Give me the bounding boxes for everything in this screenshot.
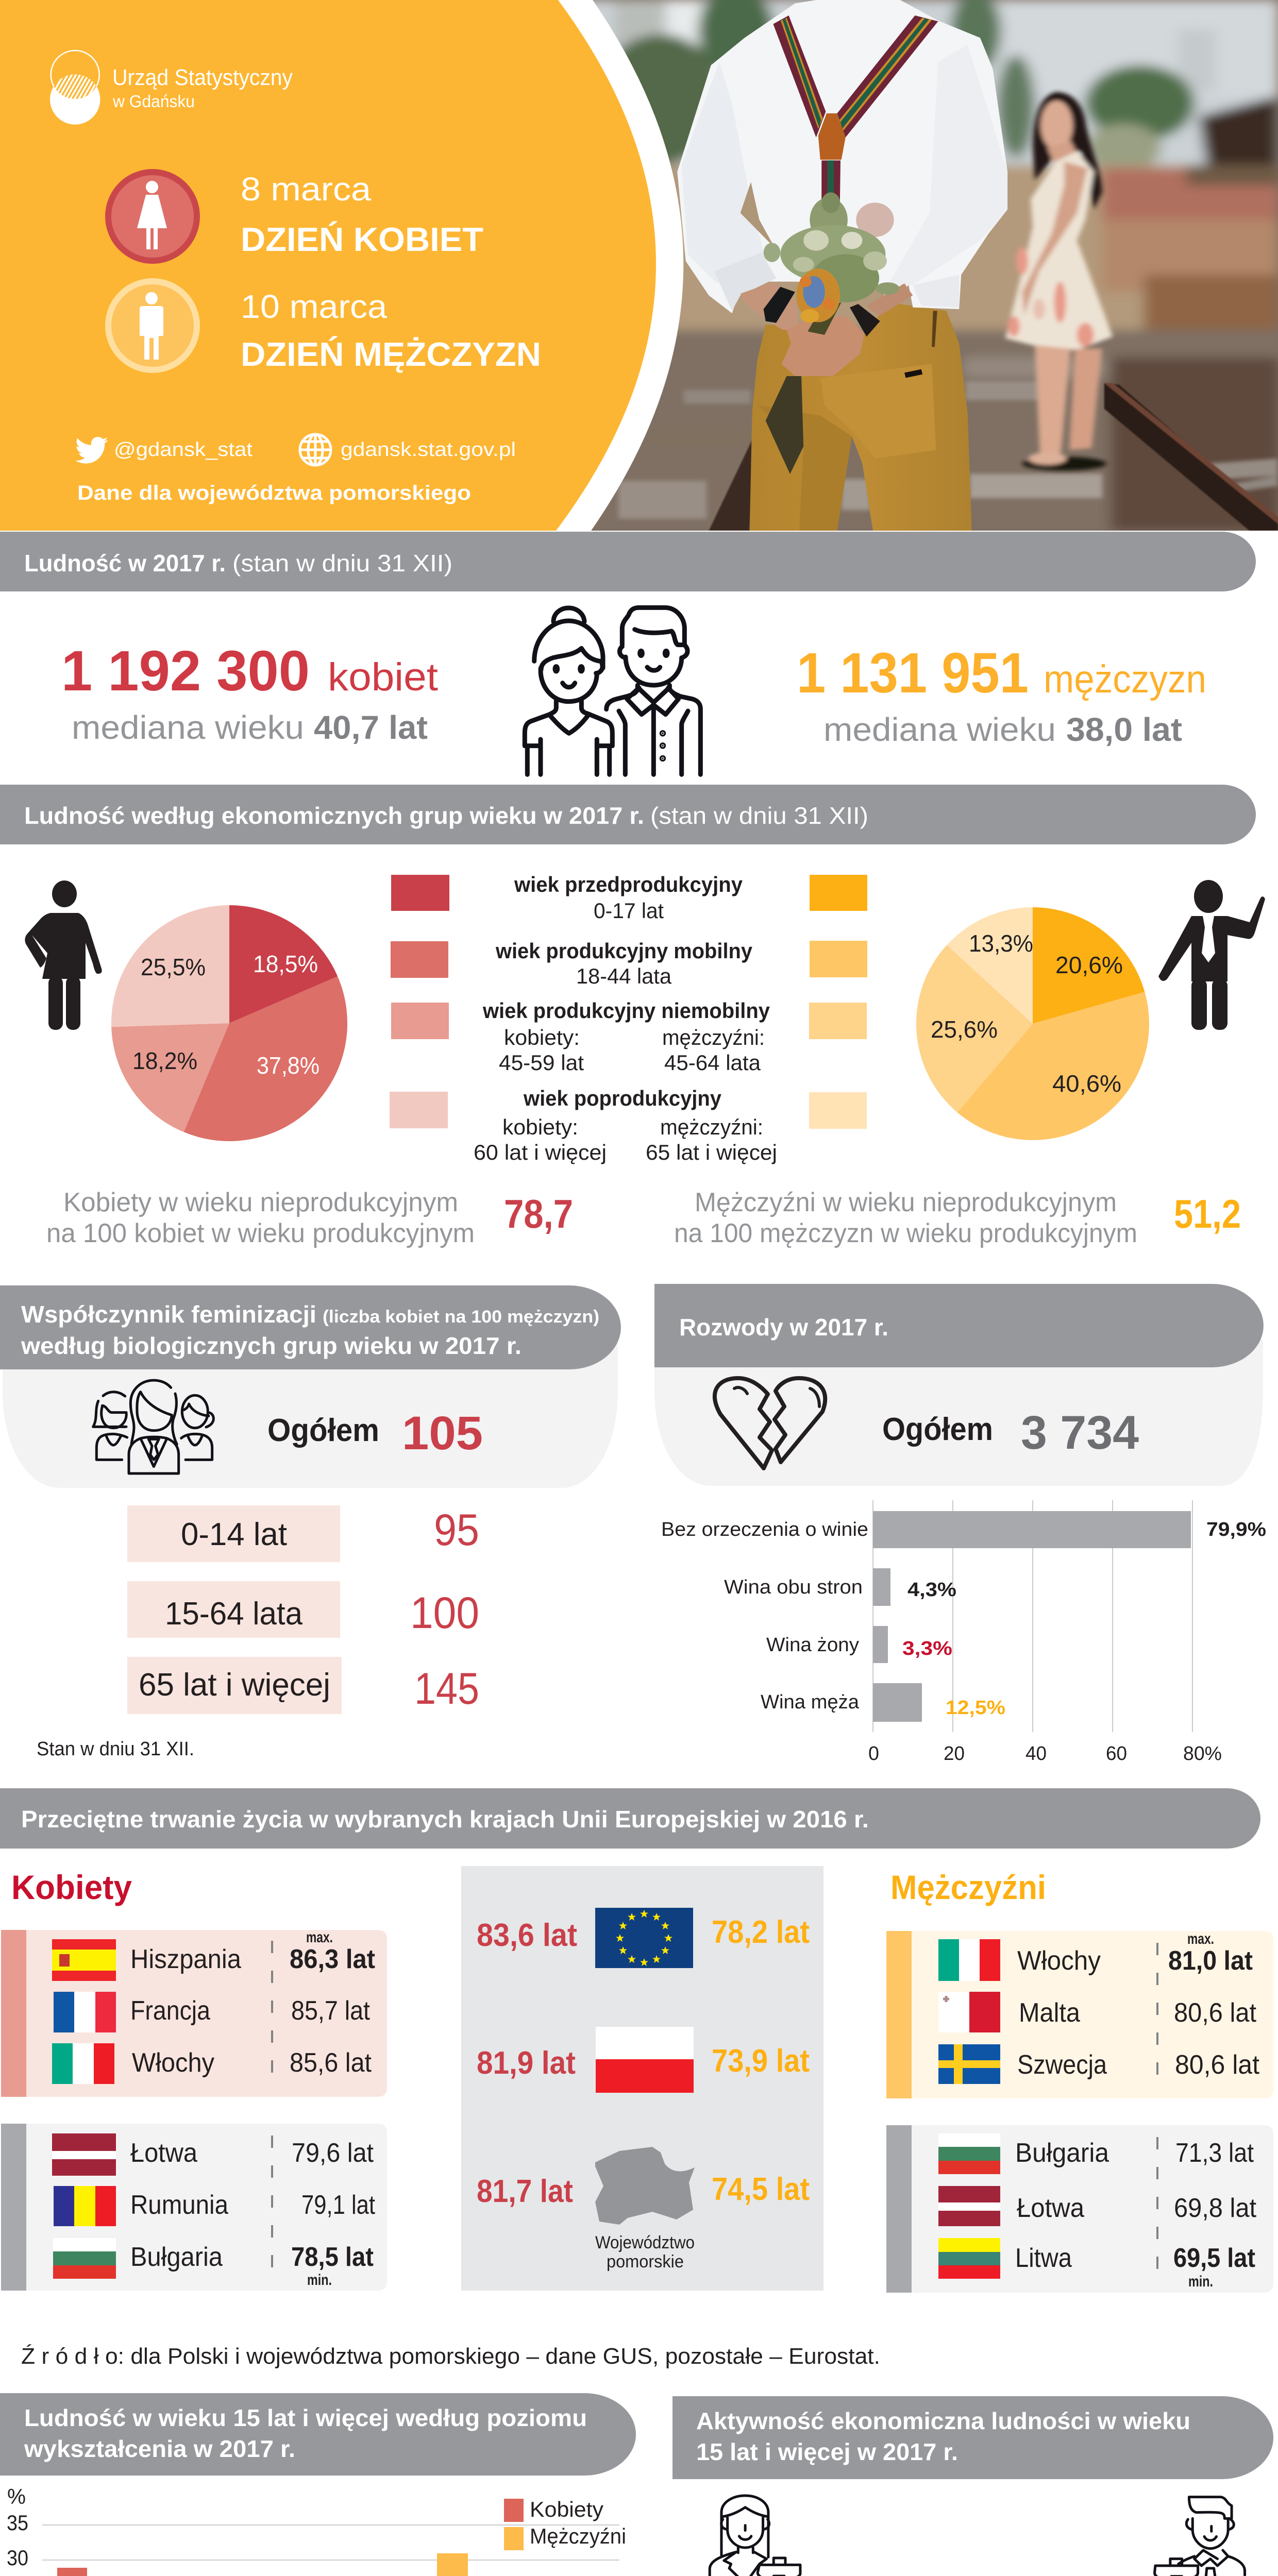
panel background — [654, 1340, 1263, 1486]
legend: age groups: wiek przedprodukcyjny — [514, 872, 743, 896]
women population: mediana wieku — [72, 709, 304, 746]
flag: France — [54, 1992, 116, 2032]
gridlines and y axis: 30 — [7, 2546, 28, 2570]
dependency ratio: women: Kobiety w wieku nieprodukcyjnym — [63, 1188, 458, 1217]
text: 8 marca Dzień Kobiet — [241, 171, 483, 258]
panel: women top countries: 85,6 lat — [290, 2048, 372, 2078]
heading: Ludność w 2017 r.: (stan w dniu 31 XII) — [232, 550, 452, 577]
legend: Mężczyźni — [530, 2524, 626, 2548]
subheading: men: Mężczyźni — [890, 1868, 1046, 1906]
heading: (liczba kobiet na 100 mężczyzn) — [323, 1307, 599, 1327]
panel: women bottom countries: Rumunia — [130, 2190, 228, 2220]
women population — [61, 639, 438, 746]
bar chart: divorces by fault: 80% — [1183, 1743, 1222, 1765]
dependency ratio: women: 78,7 — [504, 1191, 573, 1236]
website: gdansk.stat.gov.pl — [341, 439, 516, 461]
legend: age groups: kobiety: — [502, 1115, 578, 1139]
flag: Latvia — [938, 2186, 1000, 2226]
panel: women top countries: Francja — [130, 1996, 210, 2026]
icon: woman silhouette — [25, 880, 102, 1030]
bar chart: divorces by fault: Bez orzeczenia o winie — [661, 1519, 868, 1540]
panel: women top countries: Hiszpania — [130, 1944, 241, 1974]
panel: EU, Poland and Pomeranian values — [461, 1866, 823, 2291]
flag: Poland — [596, 2027, 694, 2093]
gridlines and y axis: 35 — [7, 2511, 28, 2535]
dependency ratio: men — [674, 1188, 1241, 1248]
flag: Malta — [938, 1992, 1000, 2032]
pie chart: men by age group — [916, 907, 1149, 1140]
legend: age groups — [390, 872, 867, 1164]
hands and forearms — [741, 282, 913, 376]
total value: 105 — [402, 1407, 483, 1460]
flag: Italy — [938, 1939, 1000, 1981]
pie chart: men by age group: 40,6% — [1052, 1070, 1121, 1097]
legend: age groups: wiek produkcyjny mobilny — [495, 939, 753, 963]
panel: men bottom countries: min. — [1188, 2273, 1213, 2290]
row: European Union: 78,2 lat — [712, 1914, 810, 1950]
pie chart: women by age group: 18,5% — [253, 951, 318, 977]
icon: globe — [300, 434, 331, 465]
photo: man with bouquet and woman on railway tracks — [591, 0, 1278, 531]
men population: mężczyzn — [1044, 657, 1206, 701]
bar chart: divorces by fault: Wina żony — [766, 1634, 859, 1656]
icon: woman with briefcase — [710, 2496, 801, 2576]
flag: Spain — [52, 1939, 116, 1981]
age group rows — [127, 1505, 479, 1714]
pie chart: women by age group: 37,8% — [257, 1052, 320, 1079]
row: 15-64: 100 — [410, 1588, 479, 1638]
text: 10 marca Dzień Mężczyzn: 10 marca — [241, 288, 387, 325]
panel: men bottom countries: Litwa — [1015, 2243, 1072, 2273]
pie chart: women by age group: 18,2% — [132, 1047, 197, 1074]
row: Poland — [477, 2027, 810, 2093]
panel: women bottom countries: min. — [307, 2272, 332, 2289]
bar chart: divorces by fault: 0 — [868, 1743, 879, 1765]
icon: group of people — [93, 1380, 213, 1473]
row: Poland: 73,9 lat — [712, 2043, 810, 2079]
flag: Lithuania — [938, 2238, 1000, 2279]
legend: age groups: kobiety: — [504, 1025, 580, 1049]
legend — [504, 2497, 626, 2550]
dependency ratio: men: na 100 mężczyzn w wieku produkcyjnym — [674, 1218, 1137, 1248]
suspenders — [773, 15, 938, 220]
panel: women bottom countries — [1, 2124, 387, 2291]
heading: education — [0, 2393, 636, 2476]
text: 10 marca Dzień Mężczyzn — [241, 288, 541, 373]
bar chart: divorces by fault: 60 — [1106, 1743, 1127, 1765]
panel background — [3, 1340, 618, 1488]
bar chart: divorces by fault: Wina męża — [761, 1691, 860, 1713]
row: 65+: 65 lat i więcej — [139, 1667, 330, 1703]
row: 0-14: 95 — [434, 1505, 479, 1555]
heading: Ludność w 2017 r. — [0, 532, 1256, 591]
row: 15-64: 15-64 lata — [165, 1596, 302, 1632]
panel: women top countries: Włochy — [132, 2048, 214, 2078]
text: 8 marca Dzień Kobiet: DZIEŃ KOBIET — [241, 221, 483, 258]
bar chart: education — [7, 2484, 626, 2576]
panel: feminization ratio — [0, 1285, 621, 1488]
heading: life expectancy — [0, 1788, 1260, 1849]
dependency ratio: men: 51,2 — [1174, 1191, 1241, 1236]
row: 15-64 — [127, 1581, 479, 1638]
row: Pomeranian voivodeship: Województwo — [595, 2233, 695, 2252]
panel: men top countries: 81,0 lat — [1168, 1946, 1253, 1976]
logo: Urząd Statystyczny w Gdańsku — [43, 50, 293, 125]
row: Poland: 81,9 lat — [477, 2045, 576, 2081]
twitter handle: @gdansk_stat — [114, 439, 253, 461]
panel: women top countries: 86,3 lat — [290, 1944, 375, 1974]
row: Pomeranian voivodeship — [477, 2147, 810, 2272]
source: life expectancy: Ź r ó d ł o: dla Polski i województwa pomorskiego – dane GUS, pozostałe – Eurostat. — [21, 2344, 880, 2369]
icon: broken heart — [715, 1378, 825, 1468]
flag: EU — [595, 1908, 693, 1968]
legend: age groups: 45-59 lat — [499, 1050, 584, 1075]
icon: man silhouette — [1158, 880, 1265, 1030]
row: European Union: 83,6 lat — [477, 1918, 577, 1953]
bar chart: divorces by fault — [661, 1500, 1266, 1765]
total value: 3 734 — [1021, 1406, 1139, 1459]
men population: 1 131 951 — [797, 641, 1029, 705]
panel: women bottom countries: 78,5 lat — [291, 2242, 374, 2272]
heading: Rozwody w 2017 r. — [679, 1314, 888, 1341]
men population: 38,0 lat — [1066, 711, 1182, 748]
panel: men top countries: max. — [1187, 1930, 1214, 1947]
heading: economic age groups: Ludność według ekonomicznych grup wieku w 2017 r. — [24, 802, 644, 829]
flag: Bulgaria — [53, 2238, 116, 2279]
bar chart: divorces by fault: 12,5% — [946, 1697, 1005, 1719]
pie chart: women by age group — [111, 905, 347, 1141]
panel: men top countries — [886, 1930, 1273, 2098]
total: Ogółem — [267, 1413, 379, 1448]
pie chart: women by age group: 25,5% — [141, 954, 206, 980]
panel: women bottom countries: 79,1 lat — [301, 2190, 375, 2220]
hero banner — [0, 0, 1278, 531]
bar chart: divorces by fault: 20 — [944, 1743, 965, 1765]
bars — [57, 2553, 584, 2576]
icon: woman in circle — [108, 172, 197, 261]
text: 8 marca Dzień Kobiet: 8 marca — [241, 171, 371, 208]
row: 0-14: 0-14 lat — [181, 1517, 287, 1552]
flag: Romania — [54, 2186, 116, 2226]
total: Ogółem — [882, 1412, 993, 1447]
flag: Latvia — [52, 2133, 116, 2176]
panel: women top countries: max. — [306, 1929, 333, 1946]
panel: men top countries: 80,6 lat — [1174, 1998, 1257, 2028]
legend: age groups: wiek produkcyjny niemobilny — [482, 998, 770, 1023]
row: European Union — [477, 1908, 810, 1968]
legend: age groups: mężczyźni: — [660, 1115, 763, 1139]
map: Pomeranian voivodeship — [595, 2147, 695, 2225]
gridlines and y axis: % — [7, 2484, 26, 2509]
heading: education: Ludność w wieku 15 lat i więcej według poziomu — [24, 2404, 587, 2431]
row: Pomeranian voivodeship: 74,5 lat — [712, 2172, 810, 2207]
flag: Sweden — [938, 2044, 1000, 2084]
men population: mediana wieku — [823, 711, 1056, 748]
icon: man with briefcase — [1155, 2497, 1245, 2576]
panel: men bottom countries: Łotwa — [1017, 2193, 1084, 2223]
woman in the background — [1005, 92, 1113, 470]
women population: kobiet — [328, 655, 438, 699]
legend: age groups: 60 lat i więcej — [474, 1140, 607, 1164]
note: Stan w dniu 31 XII. — [37, 1738, 194, 1760]
yellow curved panel — [0, 0, 656, 531]
heading: life expectancy: Przeciętne trwanie życia w wybranych krajach Unii Europejskiej w 2016 r. — [21, 1806, 869, 1833]
legend: age groups: mężczyźni: — [662, 1025, 765, 1049]
bouquet — [764, 192, 899, 474]
icon: twitter — [75, 437, 108, 464]
row: 65+: 145 — [414, 1664, 479, 1714]
white curve — [0, 0, 683, 531]
legend: age groups: 0-17 lat — [594, 899, 664, 923]
women population: 1 192 300 — [61, 639, 310, 703]
logo: Urząd Statystyczny w Gdańsku: Urząd Statystyczny — [112, 65, 293, 90]
panel: men bottom countries: 71,3 lat — [1175, 2138, 1254, 2168]
bar chart: divorces by fault: Wina obu stron — [724, 1577, 863, 1598]
heading: Współczynnik feminizacji — [21, 1301, 316, 1328]
heading: education: wykształcenia w 2017 r. — [24, 2435, 295, 2462]
panel: men bottom countries: 69,5 lat — [1173, 2243, 1255, 2273]
man's trousers — [750, 302, 972, 531]
pie chart: men by age group: 13,3% — [969, 930, 1033, 957]
flag: Italy — [52, 2043, 114, 2084]
railway rails — [709, 383, 1278, 531]
panel: women top countries: 85,7 lat — [291, 1996, 370, 2026]
bar chart: divorces by fault: 4,3% — [907, 1579, 956, 1601]
subheading: women: Kobiety — [11, 1868, 132, 1906]
bar chart: divorces by fault: 3,3% — [902, 1638, 952, 1659]
legend: age groups: 65 lat i więcej — [646, 1140, 777, 1164]
dependency ratio: women — [46, 1188, 573, 1248]
panel: men top countries: Włochy — [1017, 1946, 1101, 1976]
legend: Kobiety — [530, 2497, 603, 2521]
heading — [0, 1285, 621, 1369]
heading — [654, 1284, 1264, 1367]
panel: women bottom countries: Łotwa — [130, 2138, 197, 2168]
bar chart: divorces by fault: 79,9% — [1206, 1519, 1266, 1540]
row: Pomeranian voivodeship: pomorskie — [607, 2252, 684, 2272]
legend: age groups: 18-44 lata — [576, 964, 672, 988]
row: Pomeranian voivodeship: 81,7 lat — [477, 2174, 573, 2209]
dependency ratio: men: Mężczyźni w wieku nieprodukcyjnym — [695, 1188, 1117, 1217]
panel: women bottom countries: Bułgaria — [130, 2242, 223, 2272]
heading: economic age groups: (stan w dniu 31 XII) — [650, 802, 868, 829]
men population — [797, 641, 1206, 748]
panel: women bottom countries: 79,6 lat — [292, 2138, 374, 2168]
panel: men top countries: Szwecja — [1017, 2050, 1107, 2080]
heading: według biologicznych grup wieku w 2017 r. — [21, 1332, 522, 1359]
dependency ratio: women: na 100 kobiet w wieku produkcyjnym — [46, 1218, 475, 1248]
gridlines and y axis — [7, 2484, 619, 2576]
heading: Ludność w 2017 r.: Ludność w 2017 r. — [24, 550, 226, 577]
panel: men bottom countries: 69,8 lat — [1174, 2193, 1257, 2223]
pie chart: men by age group: 25,6% — [931, 1016, 998, 1043]
data scope: Dane dla województwa pomorskiego — [77, 482, 471, 504]
flag: Bulgaria — [938, 2133, 1000, 2174]
panel: men top countries: 80,6 lat — [1175, 2050, 1260, 2080]
legend: age groups: 45-64 lata — [664, 1050, 761, 1075]
panel: men bottom countries: Bułgaria — [1015, 2138, 1109, 2168]
heading: economic activity — [672, 2396, 1273, 2479]
panel: men top countries: Malta — [1019, 1998, 1080, 2028]
bar chart: divorces by fault: 40 — [1025, 1743, 1047, 1765]
icon: couple — [525, 607, 700, 774]
man's shirt — [677, 0, 1007, 313]
logo: Urząd Statystyczny w Gdańsku: w Gdańsku — [112, 92, 195, 111]
women population: 40,7 lat — [314, 709, 428, 746]
heading: economic activity: 15 lat i więcej w 2017 r. — [696, 2438, 958, 2465]
text: 10 marca Dzień Mężczyzn: DZIEŃ MĘŻCZYZN — [241, 335, 541, 373]
panel: divorces — [654, 1284, 1264, 1486]
heading: economic activity: Aktywność ekonomiczna ludności w wieku — [696, 2408, 1190, 2434]
row: 65+ — [127, 1657, 479, 1714]
pie chart: men by age group: 20,6% — [1055, 952, 1123, 978]
row: 0-14 — [127, 1505, 479, 1562]
legend: age groups: wiek poprodukcyjny — [523, 1086, 722, 1110]
panel: men bottom countries — [886, 2125, 1273, 2293]
icon: man in circle — [108, 281, 197, 370]
heading: economic age groups — [0, 785, 1256, 844]
panel: women top countries — [1, 1929, 387, 2097]
